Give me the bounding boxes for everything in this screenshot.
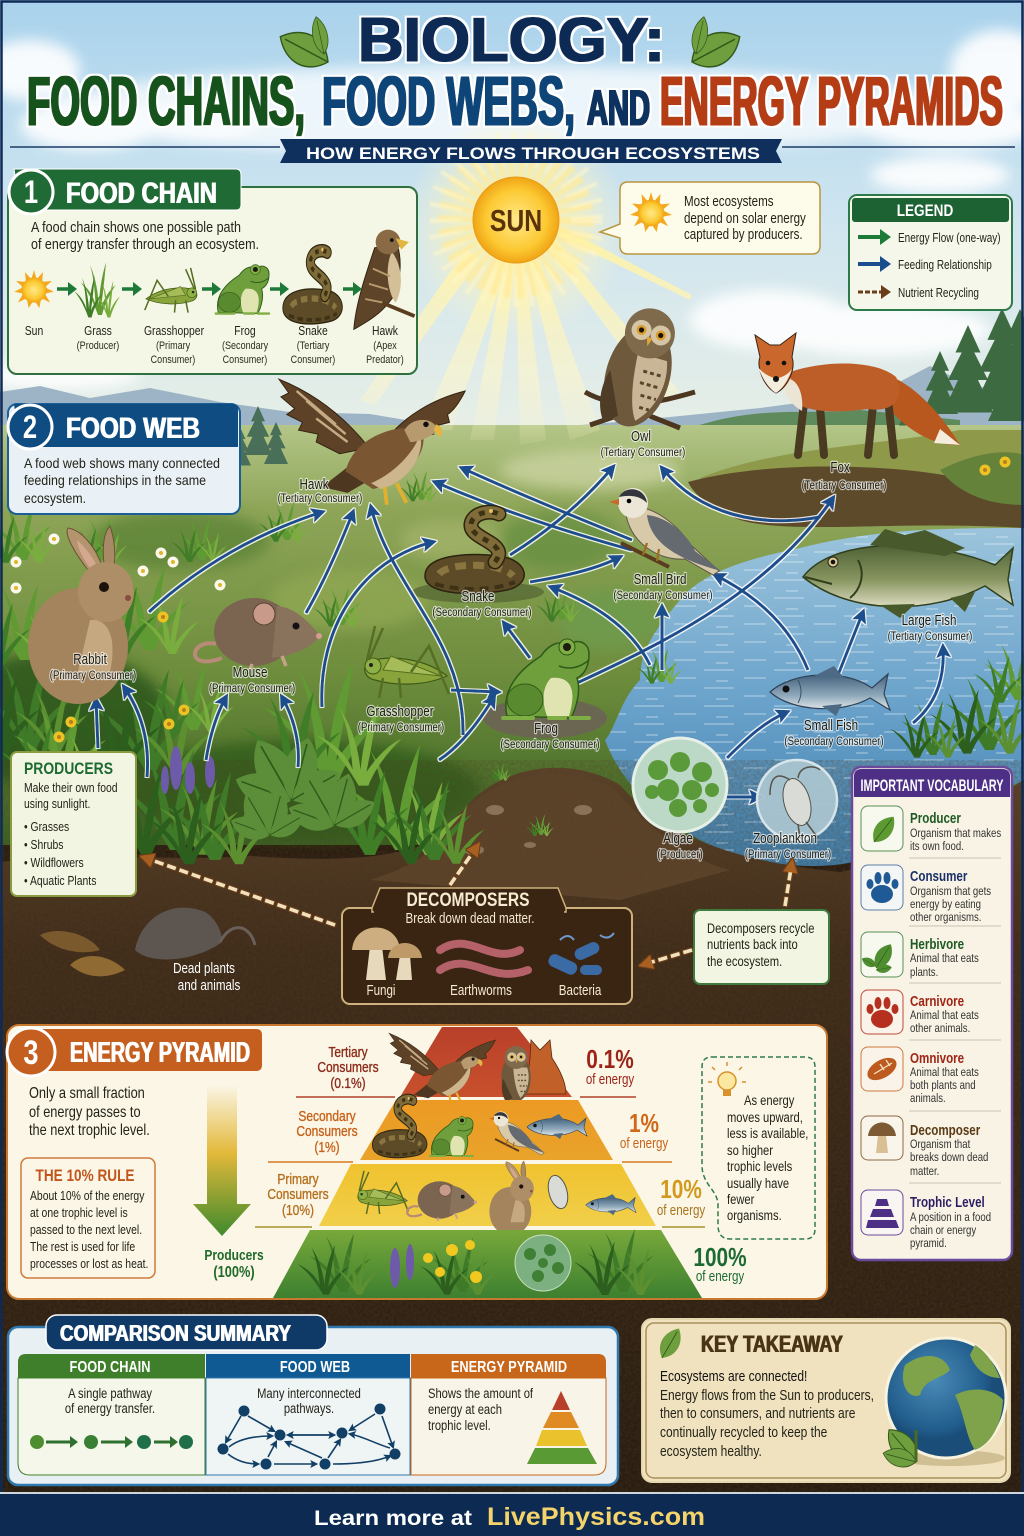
panel: food chain	[8, 169, 417, 374]
meadow mottling	[0, 450, 680, 840]
column: energy pyramid: energy at each	[428, 1402, 502, 1417]
panel: decomposers: Fungi	[367, 982, 396, 998]
callout: energy upward note: less is available,	[727, 1126, 808, 1141]
title line 2: AND	[587, 80, 650, 136]
subtitle banner: HOW ENERGY FLOWS THROUGH ECOSYSTEMS	[306, 144, 760, 163]
icon: snake	[283, 248, 342, 324]
label: owl: (Tertiary Consumer)	[601, 446, 685, 459]
pyramid intro text: Only a small fraction	[29, 1085, 145, 1102]
recycling arrows	[143, 845, 792, 965]
animal: frog	[503, 639, 589, 718]
panel: producers	[11, 752, 136, 896]
label: hawk: Hawk	[300, 476, 329, 492]
icon: bacteria	[546, 933, 614, 977]
vocab: decomposer: Organism that	[910, 1138, 970, 1151]
icon: earthworms	[440, 944, 528, 974]
column: food chain: A single pathway	[68, 1386, 153, 1401]
label: owl: Owl	[631, 428, 651, 444]
heading: food chain: 1	[24, 175, 38, 211]
left level labels: Primary	[277, 1171, 319, 1187]
right energy percentages: of energy	[586, 1071, 635, 1087]
right energy percentages: of energy	[696, 1268, 745, 1284]
callout: energy upward note: trophic levels	[727, 1159, 792, 1174]
pyramid intro text	[29, 1085, 150, 1139]
food web description: feeding relationships in the same	[24, 472, 206, 488]
label: zooplankton: Zooplankton	[753, 830, 817, 846]
food web description	[24, 455, 220, 506]
callout: recycle nutrients: the ecosystem.	[707, 954, 782, 969]
icon: left leaves	[273, 15, 335, 76]
label: owl	[601, 428, 685, 459]
label: algae	[657, 830, 703, 861]
label: producers: Producers	[204, 1247, 264, 1263]
title line 2: FOOD WEBS,	[322, 62, 575, 140]
right energy percentages: 10%	[660, 1175, 702, 1204]
takeaway text: Energy flows from the Sun to producers,	[660, 1387, 874, 1403]
column: food chain: of energy transfer.	[65, 1401, 155, 1416]
legend: nutrient recycling: Nutrient Recycling	[898, 287, 979, 300]
callout: solar energy: captured by producers.	[684, 226, 803, 242]
label: frog: (Secondary Consumer)	[500, 738, 600, 751]
label: fox	[802, 459, 886, 492]
heading: food chain: FOOD CHAIN	[66, 177, 217, 210]
heading: key takeaway: KEY TAKEAWAY	[701, 1331, 843, 1358]
animal: small fish	[770, 666, 890, 716]
takeaway text	[660, 1368, 874, 1459]
animal: hawk	[279, 379, 465, 505]
vocab: consumer: Organism that gets	[910, 885, 992, 898]
vocab: consumer	[861, 865, 992, 924]
icon: sun	[14, 270, 54, 308]
vocab: carnivore: Carnivore	[910, 993, 964, 1009]
heading: energy pyramid: 3	[23, 1033, 39, 1072]
label: producers: (100%)	[213, 1264, 255, 1281]
animal: rabbit	[28, 526, 134, 704]
panel: decomposers: Bacteria	[559, 982, 602, 998]
vocab: trophic level: chain or energy	[910, 1224, 977, 1237]
label: fox: (Tertiary Consumer)	[802, 479, 886, 492]
dead plants and animals: Dead plants	[173, 960, 235, 976]
fox mound	[700, 430, 1024, 525]
label: snake	[432, 588, 532, 619]
vocab: carnivore: Animal that eats	[910, 1009, 979, 1022]
label: small bird	[613, 571, 713, 602]
column: food web: FOOD WEB	[280, 1359, 350, 1376]
food chain description: of energy transfer through an ecosystem.	[31, 237, 259, 253]
panel: decomposers: Earthworms	[450, 982, 512, 998]
footer	[0, 1492, 1024, 1536]
chain labels: Consumer)	[151, 354, 195, 366]
left level labels: Consumers	[296, 1123, 358, 1139]
chain labels: (Apex	[373, 340, 397, 352]
vocab: decomposer: matter.	[910, 1165, 939, 1178]
food chain description	[31, 220, 259, 253]
label: algae: (Producer)	[657, 848, 703, 861]
label: frog: Frog	[534, 720, 558, 736]
label: frog	[500, 720, 600, 751]
label: small bird: (Secondary Consumer)	[613, 589, 713, 602]
animal: small bird	[609, 488, 721, 575]
chain labels	[25, 324, 404, 366]
animal: large fish	[803, 529, 1013, 618]
panel: producers: • Shrubs	[24, 838, 64, 852]
label: zooplankton	[745, 830, 831, 861]
chain labels: Snake	[298, 324, 328, 338]
arrow: energy decreases	[193, 1085, 251, 1236]
panel: producers: PRODUCERS	[24, 759, 113, 778]
sun	[444, 148, 588, 292]
vocab: herbivore	[860, 932, 979, 979]
label: hawk	[278, 476, 362, 505]
legend: LEGEND	[897, 202, 953, 220]
label: zooplankton: (Primary Consumer)	[745, 848, 831, 861]
box: the 10% rule: processes or lost as heat.	[30, 1257, 148, 1271]
panel: producers: using sunlight.	[24, 797, 90, 811]
left level labels: Tertiary	[328, 1044, 368, 1060]
animal: fox	[755, 333, 960, 455]
icon: frog	[216, 265, 269, 314]
vocab: omnivore: Omnivore	[910, 1050, 964, 1066]
panel: producers: Make their own food	[24, 781, 118, 795]
left level labels	[267, 1044, 379, 1218]
sun rays	[360, 110, 692, 445]
callout: energy upward note: As energy	[744, 1093, 795, 1108]
dead plants and animals: and animals	[178, 977, 241, 993]
takeaway text: then to consumers, and nutrients are	[660, 1405, 855, 1421]
box: the 10% rule: passed to the next level.	[30, 1223, 142, 1237]
right energy percentages	[586, 1045, 747, 1284]
chain labels: Consumer)	[223, 354, 267, 366]
box: the 10% rule: THE 10% RULE	[36, 1167, 134, 1185]
callout: recycle nutrients: Decomposers recycle	[707, 921, 815, 936]
chain labels: (Producer)	[77, 340, 119, 352]
vocab: consumer: energy by eating	[910, 898, 981, 911]
column: energy pyramid: Shows the amount of	[428, 1386, 533, 1401]
title line 2: FOOD CHAINS,	[27, 62, 305, 140]
title line 1: BIOLOGY:	[358, 6, 665, 75]
panel: important vocabulary	[852, 767, 1012, 1260]
callout: solar energy: depend on solar energy	[684, 210, 806, 226]
chain labels: Hawk	[372, 324, 398, 338]
column: energy pyramid	[411, 1354, 606, 1475]
label: mouse: Mouse	[233, 664, 267, 680]
food web description: ecosystem.	[24, 490, 86, 506]
left level labels: Secondary	[298, 1108, 356, 1124]
label: grasshopper: Grasshopper	[367, 703, 434, 719]
box: the 10% rule: About 10% of the energy	[30, 1189, 145, 1203]
label: fox: Fox	[830, 459, 850, 475]
column: food web: pathways.	[284, 1401, 334, 1416]
vocab: herbivore: Animal that eats	[910, 952, 979, 965]
vocab: carnivore	[861, 990, 979, 1035]
box: the 10% rule	[21, 1158, 155, 1278]
right energy percentages: 1%	[629, 1109, 659, 1138]
label: algae: Algae	[663, 830, 693, 846]
vocab: carnivore: other animals.	[910, 1022, 970, 1035]
takeaway text: Ecosystems are connected!	[660, 1368, 807, 1384]
heading: food chain	[9, 169, 241, 214]
pond	[605, 528, 1024, 866]
heading: energy pyramid	[7, 1028, 262, 1076]
label: small fish: Small Fish	[804, 717, 858, 733]
footer: Learn more at	[314, 1507, 472, 1530]
food web arrows	[96, 467, 943, 797]
vocab: omnivore	[861, 1047, 979, 1105]
takeaway text: ecosystem healthy.	[660, 1443, 762, 1459]
chain labels: Predator)	[366, 354, 404, 366]
label: rabbit: Rabbit	[73, 651, 107, 667]
icon: light bulb	[708, 1062, 746, 1096]
vocab: decomposer: Decomposer	[910, 1122, 980, 1138]
label: grasshopper: (Primary Consumer)	[358, 721, 444, 734]
chain labels: (Primary	[156, 340, 191, 352]
animal: mouse	[195, 598, 322, 670]
pyramid: primary level	[319, 1161, 656, 1236]
panel: decomposers: Break down dead matter.	[406, 910, 534, 926]
panel: decomposers	[342, 888, 632, 1004]
vocab: decomposer: breaks down dead	[910, 1151, 988, 1164]
dead plants and animals	[40, 908, 255, 993]
legend: energy flow	[858, 229, 1001, 245]
vocab: producer: its own food.	[910, 840, 964, 853]
heading: comparison summary: COMPARISON SUMMARY	[60, 1320, 291, 1346]
vocab: herbivore: Herbivore	[910, 936, 964, 952]
box: the 10% rule: at one trophic level is	[30, 1206, 128, 1220]
left level labels: (10%)	[282, 1202, 314, 1218]
label: rabbit	[50, 651, 136, 682]
right energy percentages: 100%	[693, 1243, 747, 1272]
label: grasshopper	[358, 703, 444, 734]
vocab: consumer: other organisms.	[910, 911, 981, 924]
callout: energy upward note: usually have	[727, 1176, 789, 1191]
icon: leaf	[654, 1324, 687, 1362]
panel: comparison summary	[8, 1315, 618, 1485]
right energy percentages: of energy	[657, 1202, 706, 1218]
label: rabbit: (Primary Consumer)	[50, 669, 136, 682]
chain labels: Sun	[25, 324, 43, 338]
vocab: omnivore: Animal that eats	[910, 1066, 979, 1079]
pyramid: producers level	[273, 1229, 702, 1298]
vocab: trophic level	[861, 1190, 991, 1250]
pyramid intro text: of energy passes to	[29, 1104, 141, 1121]
right energy percentages: of energy	[620, 1135, 669, 1151]
label: small bird: Small Bird	[634, 571, 686, 587]
title	[27, 6, 1003, 140]
label: small fish	[784, 717, 884, 748]
icon: grasshopper	[145, 268, 197, 313]
icon: zooplankton	[757, 760, 837, 840]
title line 2	[27, 62, 1003, 140]
label: mouse: (Primary Consumer)	[209, 682, 295, 695]
label: large fish: (Tertiary Consumer)	[888, 630, 972, 643]
chain diagram	[30, 1435, 193, 1449]
chain labels: (Secondary	[222, 340, 269, 352]
left level labels: (0.1%)	[330, 1075, 366, 1091]
panel: food web	[8, 404, 240, 514]
panel: producers: • Aquatic Plants	[24, 874, 97, 888]
icon: right leaves	[685, 15, 747, 76]
pyramid level lines	[255, 1097, 705, 1227]
legend: feeding relationship	[858, 256, 992, 272]
panel: energy pyramid	[7, 1025, 827, 1299]
pyramid: tertiary level	[389, 1027, 572, 1105]
label: large fish	[888, 612, 972, 643]
vocab: consumer: Consumer	[910, 868, 967, 884]
vocab: producer	[861, 806, 1002, 853]
mini pyramid	[527, 1391, 597, 1464]
footer: LivePhysics.com	[487, 1503, 705, 1531]
label: snake: (Secondary Consumer)	[432, 606, 532, 619]
vocab: omnivore: animals.	[910, 1092, 946, 1105]
heading: food web: FOOD WEB	[66, 412, 200, 445]
callout: energy upward note: so higher	[727, 1143, 773, 1158]
sun label: SUN	[490, 203, 542, 238]
subtitle banner	[10, 139, 1015, 163]
food web description: A food web shows many connected	[24, 455, 220, 471]
column: energy pyramid: trophic level.	[428, 1418, 491, 1433]
heading: food web	[8, 404, 238, 449]
label: snake: Snake	[462, 588, 494, 604]
chain labels: Grass	[84, 324, 112, 338]
vocab: trophic level: A position in a food	[910, 1211, 991, 1224]
column: food web: Many interconnected	[257, 1386, 361, 1401]
vocab: trophic level: Trophic Level	[910, 1194, 985, 1210]
callout: solar energy	[600, 182, 820, 254]
panel: decomposers: DECOMPOSERS	[407, 888, 530, 910]
vocab: trophic level: pyramid.	[910, 1237, 947, 1250]
chain labels: (Tertiary	[297, 340, 330, 352]
vegetation	[0, 456, 1024, 864]
callout: energy upward note	[702, 1057, 815, 1239]
label: producers	[204, 1247, 264, 1281]
animal: grasshopper	[365, 626, 449, 698]
callout: energy upward note: fewer	[727, 1192, 754, 1207]
chain labels: Grasshopper	[144, 324, 204, 338]
column: food web	[206, 1354, 410, 1475]
vocab: producer: Organism that makes	[910, 827, 1002, 840]
label: small fish: (Secondary Consumer)	[784, 735, 884, 748]
legend: nutrient recycling	[858, 285, 979, 300]
label: large fish: Large Fish	[902, 612, 956, 628]
chain labels: Frog	[234, 324, 256, 338]
legend	[849, 195, 1012, 310]
callout: solar energy: Most ecosystems	[684, 193, 774, 209]
column: food chain	[18, 1354, 205, 1475]
animal: owl	[585, 301, 695, 436]
icon: globe with sprout	[881, 1338, 1006, 1471]
icon: algae	[633, 738, 727, 832]
callout: energy upward note: organisms.	[727, 1208, 782, 1223]
right energy percentages: 0.1%	[586, 1045, 634, 1074]
panel: producers: • Wildflowers	[24, 856, 84, 870]
animal: snake	[425, 509, 524, 593]
network diagram	[218, 1404, 400, 1470]
vocab: omnivore: both plants and	[910, 1079, 976, 1092]
panel: key takeaway	[642, 1319, 1010, 1482]
food chain description: A food chain shows one possible path	[31, 220, 241, 236]
left level labels: Consumers	[267, 1186, 329, 1202]
legend: energy flow: Energy Flow (one-way)	[898, 232, 1001, 245]
column: food chain: FOOD CHAIN	[70, 1359, 150, 1376]
left level labels: (1%)	[314, 1139, 340, 1155]
label: hawk: (Tertiary Consumer)	[278, 492, 362, 505]
vocab: herbivore: plants.	[910, 966, 938, 979]
icon: grass	[74, 262, 120, 318]
column: energy pyramid: ENERGY PYRAMID	[451, 1359, 567, 1376]
vocab: decomposer	[861, 1116, 988, 1178]
label: mouse	[209, 664, 295, 695]
box: the 10% rule: The rest is used for life	[30, 1240, 136, 1254]
pyramid: secondary level	[360, 1097, 613, 1160]
callout: recycle nutrients	[694, 910, 829, 984]
icon: hawk	[354, 230, 415, 329]
pyramid intro text: the next trophic level.	[29, 1122, 150, 1139]
heading: comparison summary	[46, 1315, 327, 1350]
left level labels: Consumers	[317, 1059, 379, 1075]
heading: energy pyramid: ENERGY PYRAMID	[70, 1037, 250, 1069]
soil	[0, 768, 1024, 1500]
chain arrows	[57, 282, 362, 296]
callout: recycle nutrients: nutrients back into	[707, 937, 798, 952]
vocab: producer: Producer	[910, 810, 961, 826]
callout: energy upward note: moves upward,	[727, 1110, 803, 1125]
panel: producers: • Grasses	[24, 820, 69, 834]
heading: food web: 2	[23, 410, 37, 446]
legend: feeding relationship: Feeding Relationship	[898, 259, 992, 272]
icon: fungi	[352, 928, 422, 980]
takeaway text: continually recycled to keep the	[660, 1424, 827, 1440]
chain labels: Consumer)	[291, 354, 335, 366]
